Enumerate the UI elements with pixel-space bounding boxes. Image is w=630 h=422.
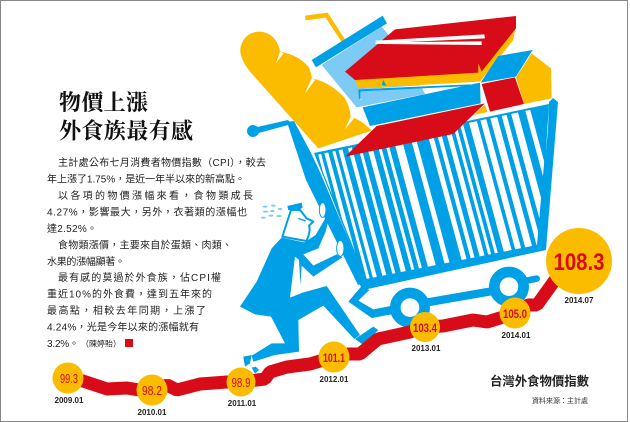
chart heading: 台灣外食物價指數 <box>490 374 590 388</box>
bread <box>240 32 372 148</box>
body text: 4.27%，影響最大，另外，衣著類的漲幅也 <box>47 205 247 218</box>
source note: 資料來源：主計處 <box>532 396 588 405</box>
red book <box>345 16 516 80</box>
point 2010.01: 2010.01 <box>138 408 167 417</box>
point 2009.01 <box>52 362 84 405</box>
point 2012.01 <box>318 342 350 384</box>
point 2014.01: 105.0 <box>503 307 527 321</box>
yellow book pages <box>355 30 515 88</box>
body text: 以各項的物價漲幅來看，食物類成長 <box>58 189 253 202</box>
body text: 水果的漲幅顯著。 <box>47 255 125 268</box>
groceries in cart <box>240 13 552 157</box>
point 2012.01: 101.1 <box>323 351 345 365</box>
point 2013.01 <box>410 312 441 353</box>
body text: 主計處公布七月消費者物價指數（CPI），較去 <box>58 156 266 169</box>
body text: 年上漲了1.75%，是近一年半以來的新高點。 <box>47 172 245 186</box>
body coat and legs <box>240 218 360 362</box>
blue lid <box>312 16 387 67</box>
body text: 最高點，相較去年同期，上漲了 <box>47 304 206 317</box>
point 2014.01 <box>500 298 531 340</box>
point 2010.01: 98.2 <box>142 383 162 398</box>
title: 外食族最有感 <box>59 118 193 144</box>
back foot <box>243 355 259 373</box>
body text: 最有感的莫過於外食族，佔CPI權 <box>58 271 221 284</box>
point 2011.01 <box>226 368 257 408</box>
point 2014.07: 2014.07 <box>565 296 594 305</box>
front foot <box>355 327 378 345</box>
point 2011.01: 2011.01 <box>228 399 257 408</box>
body text: 重近10%的外食費，達到五年來的 <box>47 288 212 301</box>
point 2010.01 <box>136 374 168 417</box>
point 2009.01: 2009.01 <box>55 396 84 405</box>
red tray <box>345 103 485 157</box>
right box <box>481 50 552 112</box>
head <box>282 203 313 241</box>
point 2009.01: 99.3 <box>60 371 78 386</box>
sweat drops <box>261 205 282 219</box>
barcode basket <box>314 104 549 280</box>
title: 物價上漲 <box>59 90 148 115</box>
shirt <box>290 257 301 298</box>
body text: 達2.52%。 <box>47 223 97 235</box>
cart push bar yellow <box>305 13 345 42</box>
body text: 3.2%。 <box>47 339 79 350</box>
point 2013.01: 2013.01 <box>412 344 441 353</box>
body text: 食物類漲價，主要來自於蛋類、肉類、 <box>58 238 232 251</box>
blue box <box>358 80 481 126</box>
price index chart <box>52 228 612 417</box>
hands <box>319 203 344 256</box>
title <box>59 90 193 144</box>
point 2014.07 <box>546 228 612 305</box>
body text <box>47 156 266 350</box>
cart frame left <box>287 121 366 285</box>
point 2013.01: 103.4 <box>413 321 437 335</box>
yellow wedge <box>473 105 488 115</box>
point 2012.01: 2012.01 <box>320 375 349 384</box>
white gap <box>358 82 480 100</box>
point 2014.07: 108.3 <box>554 249 604 276</box>
light blue box <box>322 27 425 107</box>
cart handle <box>247 120 292 137</box>
cart frame right <box>537 98 558 250</box>
shopping cart <box>247 98 579 322</box>
cart bottom band <box>358 241 546 290</box>
cart chassis and wheels <box>348 272 537 322</box>
body text: 4.24%，光是今年以來的漲幅就有 <box>47 320 199 334</box>
body text: （陳婷貽） <box>81 338 121 348</box>
man pushing cart <box>240 203 378 373</box>
red ribbon line <box>68 261 579 392</box>
point 2014.01: 2014.01 <box>502 331 531 340</box>
point 2011.01: 98.9 <box>232 375 250 390</box>
